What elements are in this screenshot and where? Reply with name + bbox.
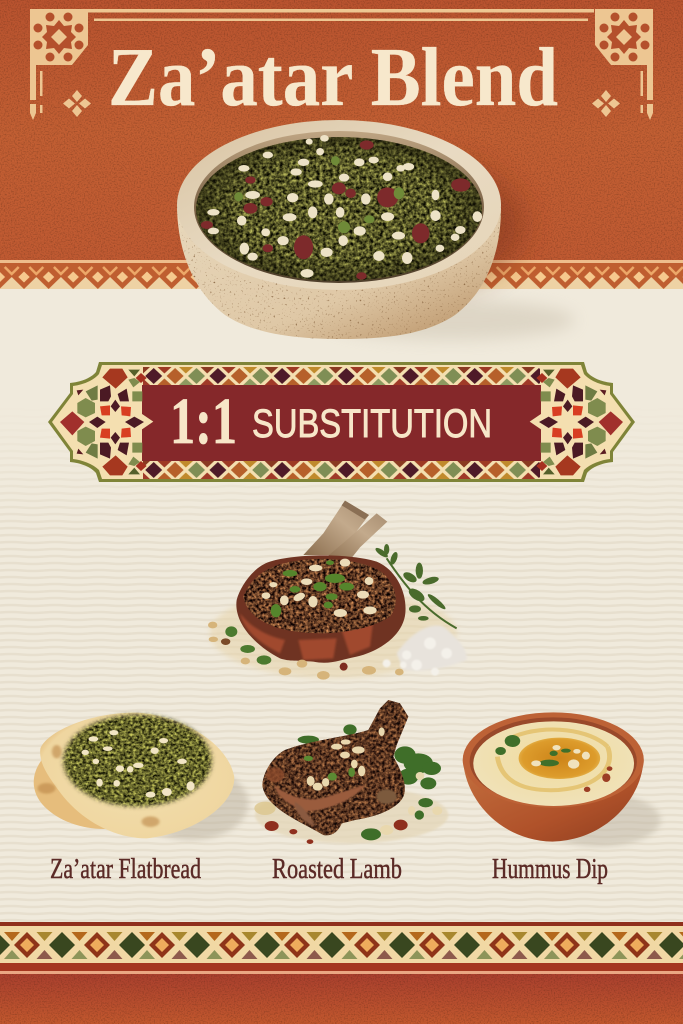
seared edge	[240, 613, 373, 660]
chop char texture	[262, 700, 408, 835]
right rosette	[530, 369, 623, 475]
top frame lines	[88, 9, 594, 21]
label: roasted lamb: Roasted Lamb	[272, 854, 402, 885]
bottom mosaic border	[0, 922, 683, 974]
mound edge shading	[196, 137, 482, 281]
toast marks	[38, 745, 160, 827]
seeds	[262, 559, 377, 617]
seasoned crust	[243, 559, 396, 633]
oil pool	[254, 802, 276, 815]
parsley garnish	[298, 724, 441, 840]
olive oil pool	[519, 738, 600, 779]
main bowl of za'atar	[177, 120, 501, 339]
seared highlights	[266, 768, 397, 827]
banner outer frame	[48, 362, 635, 482]
corner ornament right	[595, 9, 653, 120]
spice mound	[196, 137, 482, 281]
panel: terracotta footer	[0, 974, 683, 1024]
label: za'atar flatbread: Za’atar Flatbread	[50, 854, 201, 885]
spice dusting	[210, 588, 457, 678]
small diamond ornament right	[592, 90, 620, 117]
clay bowl	[463, 760, 643, 842]
bowl rim	[177, 120, 501, 290]
scattered seeds and herbs	[208, 622, 404, 680]
title: Za’atar Blend	[108, 31, 558, 124]
garnish	[495, 735, 612, 792]
paper texture fade	[0, 400, 683, 530]
seeds	[307, 727, 442, 835]
panel: terracotta header	[0, 0, 683, 263]
diamond strip bottom	[143, 461, 540, 479]
bones	[303, 501, 387, 560]
bowl shadow	[295, 157, 575, 340]
bowl inside	[470, 717, 637, 805]
back flatbread	[34, 757, 118, 829]
shadow	[538, 793, 661, 847]
left rosette	[60, 369, 153, 475]
1:1 numeral: 1:1	[170, 385, 237, 458]
corner ornament left	[30, 9, 88, 120]
seeds and sumac	[201, 135, 482, 280]
bowl rim	[463, 712, 644, 808]
herbs on top	[304, 756, 355, 781]
meat	[236, 555, 406, 663]
chili flakes	[265, 820, 408, 844]
parsley	[271, 560, 354, 617]
bowl inner wall	[194, 131, 484, 283]
sea salt pile	[383, 625, 467, 676]
food: za'atar flatbread	[34, 713, 248, 840]
banner cream inset	[52, 365, 631, 479]
lamb chop hero	[208, 501, 467, 680]
paper ribbed texture	[0, 400, 683, 922]
herb sprig	[374, 544, 457, 628]
small diamond ornament left	[63, 90, 91, 117]
spice dusting	[255, 787, 448, 843]
label: hummus dip: Hummus Dip	[492, 854, 608, 885]
red centre panel	[142, 385, 541, 461]
top diamond border	[0, 260, 683, 289]
front flatbread	[40, 713, 234, 838]
chop	[262, 700, 408, 835]
hummus	[473, 721, 634, 806]
substitution label: SUBSTITUTION	[252, 402, 492, 446]
diamond strip top	[143, 367, 540, 385]
shadow	[134, 767, 248, 840]
food: roasted lamb	[254, 700, 448, 844]
ornamental frame	[30, 9, 653, 120]
za'atar topping	[63, 715, 212, 807]
sesame seeds	[82, 730, 195, 798]
hummus swirl	[497, 730, 610, 790]
food: hummus dip	[463, 712, 661, 847]
banner: 1:1 substitution	[48, 362, 635, 482]
bowl body	[177, 208, 501, 339]
